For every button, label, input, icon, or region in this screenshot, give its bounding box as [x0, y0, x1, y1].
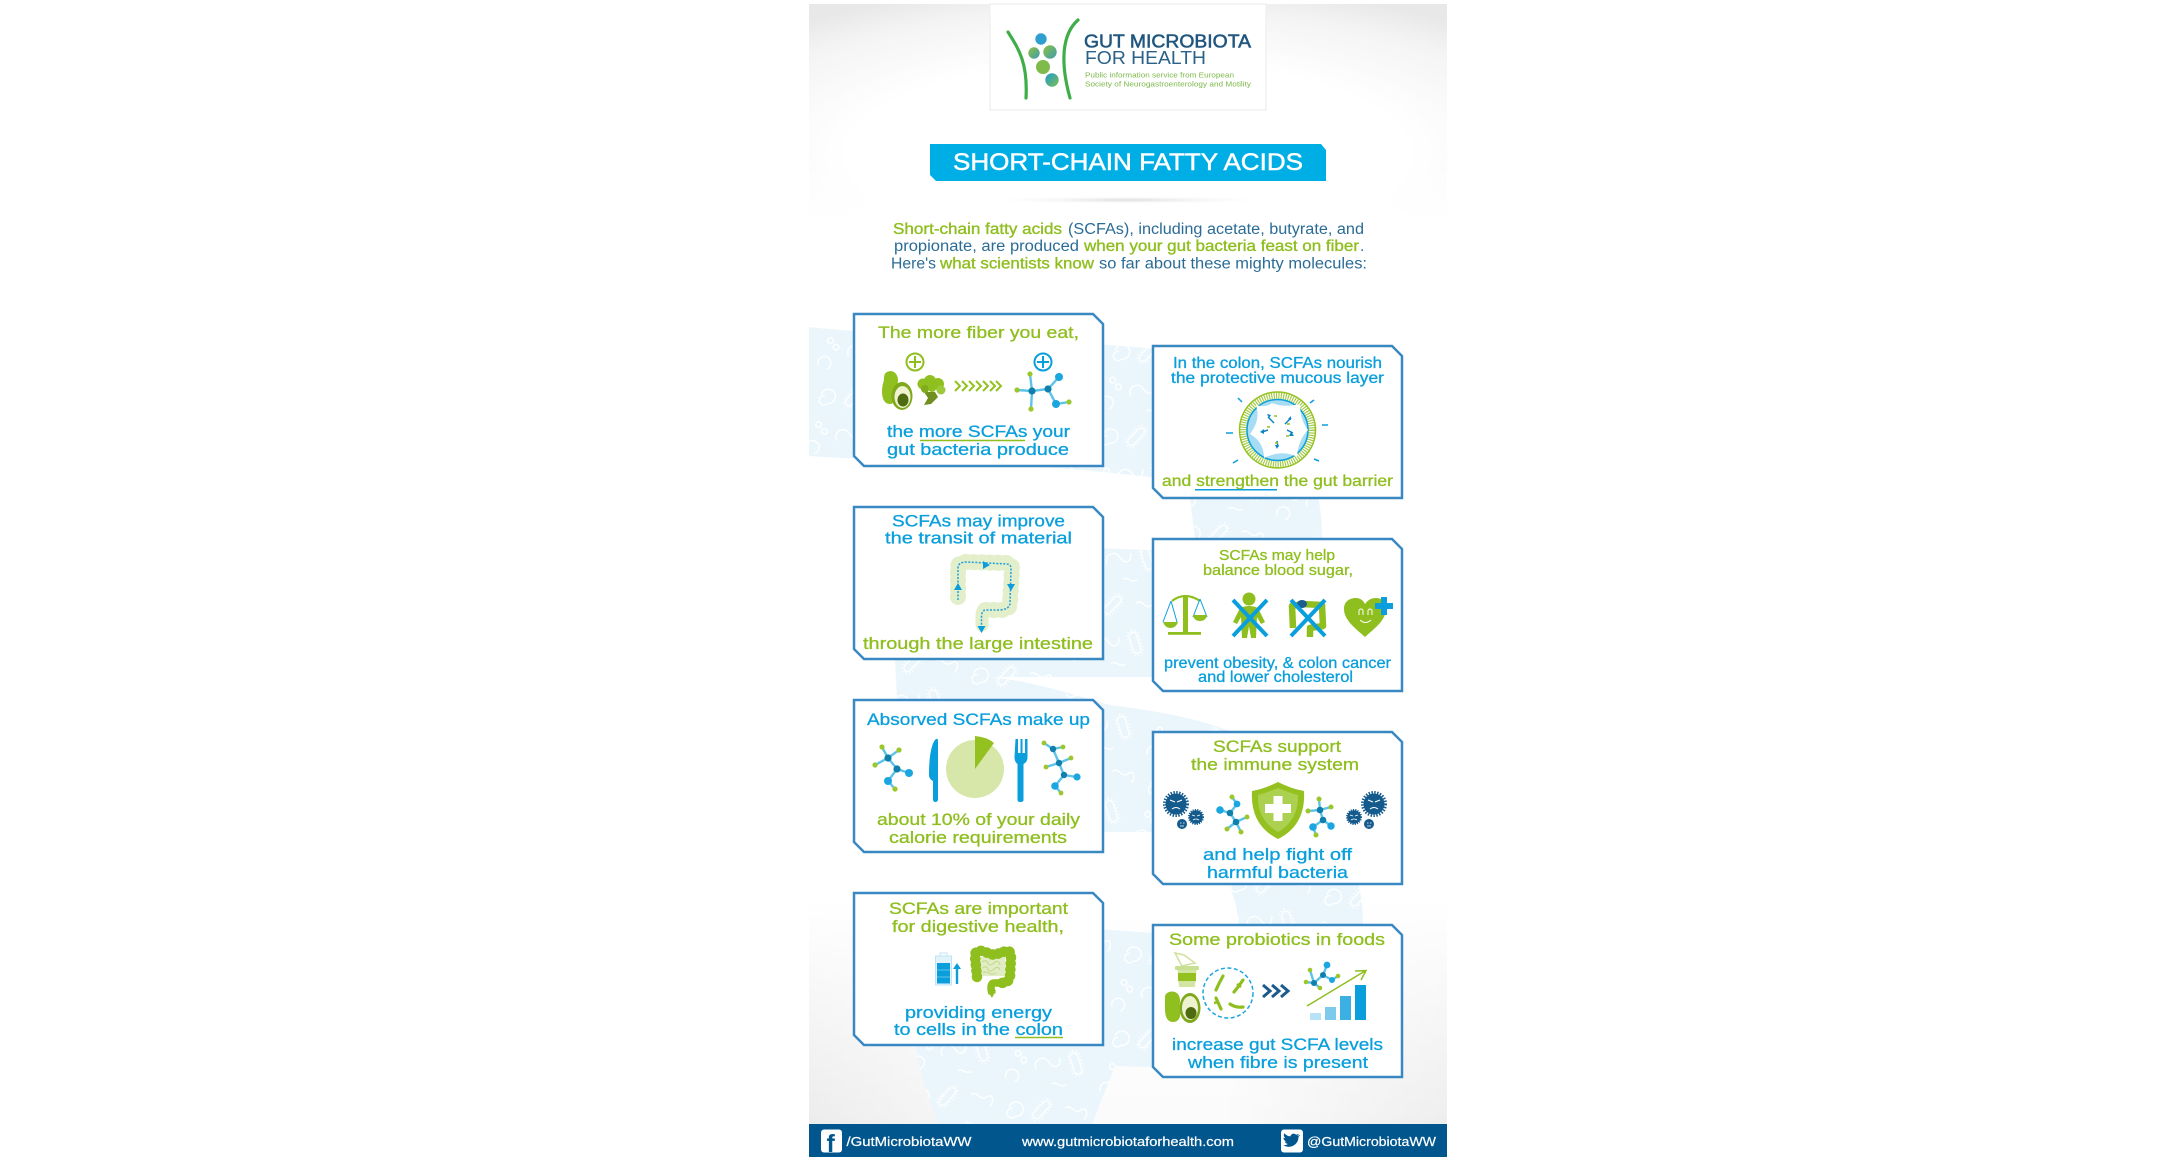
- intro text: .: [1360, 238, 1364, 255]
- panel: blood sugar, obesity, cholesterol: [1153, 539, 1402, 691]
- closing text: [1203, 845, 1352, 882]
- twitter handle: @GutMicrobiotaWW: [1307, 1135, 1436, 1149]
- logo wordmark: GUT MICROBIOTA: [1084, 30, 1252, 52]
- icon: harmful bacteria left: [1166, 794, 1203, 829]
- chart: 10 percent pie: [946, 736, 1004, 798]
- heading: balance blood sugar,: [1203, 562, 1353, 579]
- icon: avocado: [1165, 991, 1200, 1023]
- closing text: prevent obesity, & colon cancer: [1164, 655, 1391, 672]
- bar chart: rising SCFA levels: [1307, 970, 1366, 1020]
- icon: blue plus: [1034, 354, 1052, 370]
- icon: molecule right: [1306, 796, 1335, 838]
- heading: SCFAs are important: [889, 899, 1068, 918]
- heading: The more fiber you eat,: [878, 323, 1079, 342]
- title shadow: [978, 196, 1278, 204]
- closing text: increase gut SCFA levels: [1172, 1035, 1383, 1054]
- heading: [1171, 355, 1384, 387]
- facebook handle: /GutMicrobiotaWW: [846, 1135, 972, 1149]
- intro text: what scientists know: [939, 256, 1095, 272]
- icon: probiotic bacteria in dashed circle: [1203, 968, 1253, 1018]
- closing text: to cells in the colon: [894, 1020, 1063, 1039]
- intro text: propionate, are produced: [894, 238, 1079, 255]
- heading: for digestive health,: [892, 917, 1064, 936]
- heading: [1191, 737, 1359, 774]
- icon: colon with transit arrows: [954, 561, 1015, 633]
- panel: digestive health: [854, 893, 1103, 1045]
- logo block: [990, 4, 1266, 110]
- logo icon: gut walls and microbes: [1008, 20, 1078, 98]
- intro text: when your gut bacteria feast on fiber: [1083, 238, 1359, 255]
- icon: molecule: [1014, 371, 1072, 412]
- panel: transit through large intestine: [854, 507, 1103, 659]
- closing text: [1172, 1035, 1383, 1072]
- closing text: providing energy: [905, 1003, 1053, 1022]
- icon: molecule left: [1216, 794, 1250, 834]
- footer bar: [809, 1124, 1447, 1157]
- intro text: Here's: [891, 256, 936, 272]
- heading: SCFAs may improve: [892, 512, 1065, 530]
- heading: the transit of material: [885, 528, 1072, 548]
- heading: [1203, 547, 1353, 579]
- icon: green plus: [906, 354, 924, 370]
- closing text: gut bacteria produce: [887, 440, 1069, 459]
- closing text: when fibre is present: [1187, 1053, 1368, 1072]
- icon: shield with cross: [1252, 782, 1304, 839]
- heading: Some probiotics in foods: [1169, 930, 1385, 949]
- closing text: [877, 810, 1081, 847]
- heading: SCFAs support: [1213, 737, 1341, 756]
- icon: molecule left: [872, 744, 913, 792]
- icon: fork: [1014, 739, 1028, 802]
- icon: molecule right: [1042, 741, 1081, 795]
- icon: person crossed out: [1233, 592, 1267, 638]
- heading: [889, 899, 1068, 936]
- logo wordmark: [1084, 30, 1252, 88]
- icon: battery with up arrow: [936, 953, 961, 985]
- heading: Absorved SCFAs make up: [867, 710, 1090, 729]
- arrow chevrons: [1263, 985, 1288, 997]
- panel: more fiber, more SCFAs: [854, 314, 1103, 466]
- intro text: [891, 221, 1367, 272]
- closing text: the more SCFAs your: [887, 422, 1070, 441]
- logo wordmark: Society of Neurogastroenterology and Motility: [1085, 80, 1251, 88]
- heading: the protective mucous layer: [1171, 370, 1384, 387]
- panel: mucous layer and gut barrier: [1153, 346, 1402, 498]
- intro text: so far about these mighty molecules:: [1099, 256, 1367, 272]
- closing text: harmful bacteria: [1207, 863, 1349, 882]
- closing text: [1164, 655, 1391, 686]
- panel: probiotics in foods: [1153, 925, 1402, 1077]
- icon: molecule: [1304, 962, 1340, 990]
- closing text: [894, 1003, 1063, 1039]
- icon: harmful bacteria right: [1347, 794, 1384, 829]
- website: www.gutmicrobiotaforhealth.com: [1021, 1135, 1234, 1149]
- arrow chevrons: [955, 381, 1001, 391]
- closing text: and help fight off: [1203, 845, 1352, 864]
- icon: broccoli: [918, 375, 946, 405]
- heading: [885, 512, 1072, 548]
- title banner: [930, 144, 1326, 181]
- icon: large intestine: [975, 951, 1011, 998]
- icon: twitter: [1281, 1130, 1303, 1152]
- panel: immune system: [1153, 732, 1402, 884]
- intro text: (SCFAs), including acetate, butyrate, and: [1068, 221, 1364, 238]
- closing text: calorie requirements: [889, 828, 1067, 847]
- icon: yogurt cup: [1175, 953, 1199, 987]
- icon: balance scale: [1163, 596, 1207, 635]
- logo wordmark: FOR HEALTH: [1085, 47, 1206, 68]
- closing text: and lower cholesterol: [1198, 669, 1353, 686]
- closing text: about 10% of your daily: [877, 810, 1081, 829]
- heading: the immune system: [1191, 755, 1359, 774]
- title banner: SHORT-CHAIN FATTY ACIDS: [953, 149, 1303, 176]
- closing text: and strengthen the gut barrier: [1162, 473, 1393, 490]
- closing text: [887, 422, 1070, 459]
- icon: facebook: [821, 1130, 842, 1157]
- icon: gut cross-section: [1226, 392, 1328, 468]
- intro text: Short-chain fatty acids: [893, 221, 1062, 238]
- closing text: through the large intestine: [863, 634, 1093, 653]
- icon: avocado: [882, 371, 912, 410]
- icon: knife: [929, 739, 938, 802]
- icon: colon crossed out: [1291, 600, 1325, 637]
- icon: smiling heart with plus: [1344, 597, 1393, 637]
- logo wordmark: Public information service from European: [1085, 70, 1234, 80]
- heading: In the colon, SCFAs nourish: [1173, 355, 1382, 372]
- decorative bacteria ribbon: [809, 327, 1363, 1124]
- heading: SCFAs may help: [1219, 547, 1335, 564]
- background panel: [809, 4, 1447, 1124]
- panel: calorie requirements: [854, 700, 1103, 852]
